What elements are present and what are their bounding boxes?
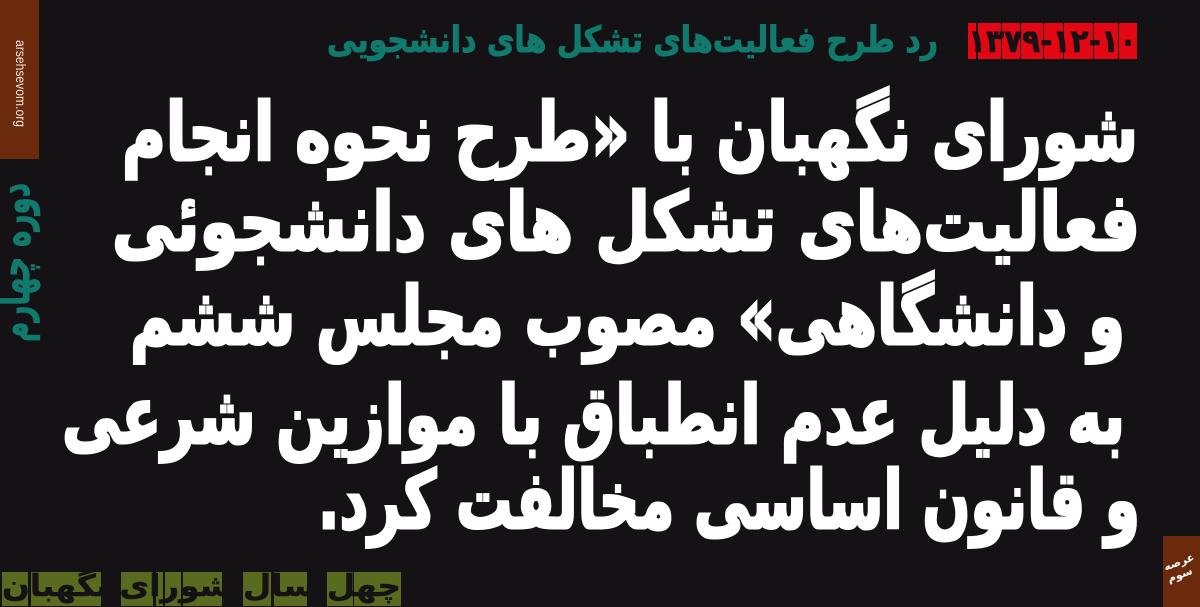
logo calligraphy: سوم — [1166, 564, 1194, 585]
footer strip: series title: چهل سال شورای نگهبان — [2, 568, 401, 604]
heading: رد طرح فعالیت‌های تشکل های دانشجویی — [327, 20, 938, 61]
date badge: ۱۳۷۹-۱۲-۱۰ — [968, 22, 1137, 60]
side tab: website: arsehsevom.org — [13, 40, 29, 127]
logo calligraphy: عرصه — [1162, 550, 1196, 574]
logo calligraphy — [1162, 550, 1196, 585]
side tab: website — [0, 0, 39, 159]
logo tab — [1162, 536, 1200, 607]
main statement — [62, 86, 1140, 548]
